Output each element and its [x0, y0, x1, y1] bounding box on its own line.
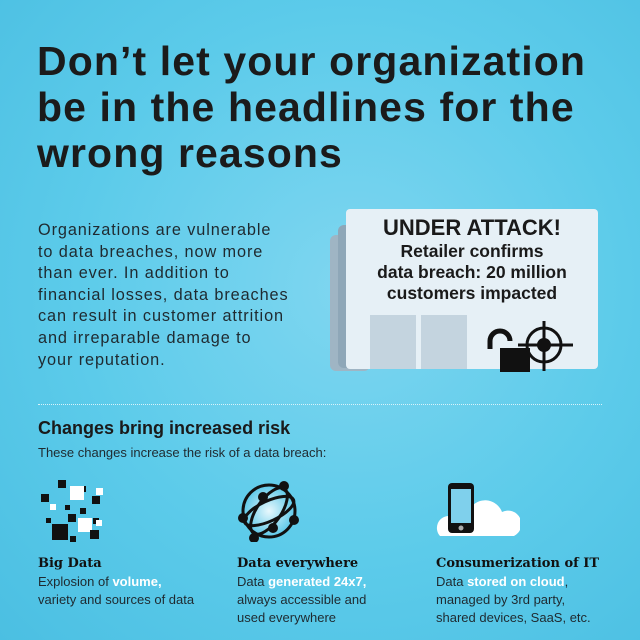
- headline: data breach: 20 million: [377, 262, 567, 282]
- icon: phone and cloud: [436, 483, 520, 536]
- divider: [38, 404, 602, 405]
- intro text: to data breaches, now more: [38, 243, 263, 261]
- column: data everywhere: always accessible and: [237, 592, 366, 607]
- intro text: and irreparable damage to: [38, 329, 251, 347]
- title: [36, 38, 586, 176]
- column: consumerization: shared devices, SaaS, etc.: [436, 610, 591, 625]
- title: Don’t let your organization: [37, 38, 586, 84]
- column: big data: [38, 556, 194, 607]
- title: be in the headlines for the: [37, 84, 575, 130]
- intro text: Organizations are vulnerable: [38, 221, 271, 239]
- column: data everywhere: Data everywhere: [237, 556, 358, 571]
- section heading: Changes bring increased risk: [38, 418, 290, 438]
- column: data everywhere: used everywhere: [237, 610, 336, 625]
- column: consumerization: Data stored on cloud,: [436, 574, 568, 589]
- column: data everywhere: [237, 556, 366, 625]
- column: consumerization: Consumerization of IT: [436, 556, 599, 571]
- column: consumerization: managed by 3rd party,: [436, 592, 565, 607]
- column: big data: Explosion of volume,: [38, 574, 162, 589]
- headline: UNDER ATTACK!: [383, 215, 561, 240]
- intro text: can result in customer attrition: [38, 307, 284, 325]
- column: data everywhere: Data generated 24x7,: [237, 574, 366, 589]
- title: wrong reasons: [37, 130, 343, 176]
- newspaper illustration: [330, 209, 598, 372]
- icon: globe network: [238, 481, 299, 542]
- intro text: your reputation.: [38, 351, 166, 369]
- intro text: than ever. In addition to: [38, 264, 230, 282]
- subheading: These changes increase the risk of a data breach:: [38, 445, 326, 460]
- headline: Retailer confirms: [401, 241, 543, 261]
- intro text: [38, 221, 289, 369]
- column: consumerization: [436, 556, 599, 625]
- lock: [490, 331, 510, 349]
- column: big data: Big Data: [38, 556, 102, 571]
- headline: customers impacted: [387, 283, 557, 303]
- intro text: financial losses, data breaches: [38, 286, 289, 304]
- column: big data: variety and sources of data: [38, 592, 194, 607]
- headline: [377, 215, 567, 303]
- target: [518, 321, 573, 371]
- icon: big data squares: [41, 480, 103, 542]
